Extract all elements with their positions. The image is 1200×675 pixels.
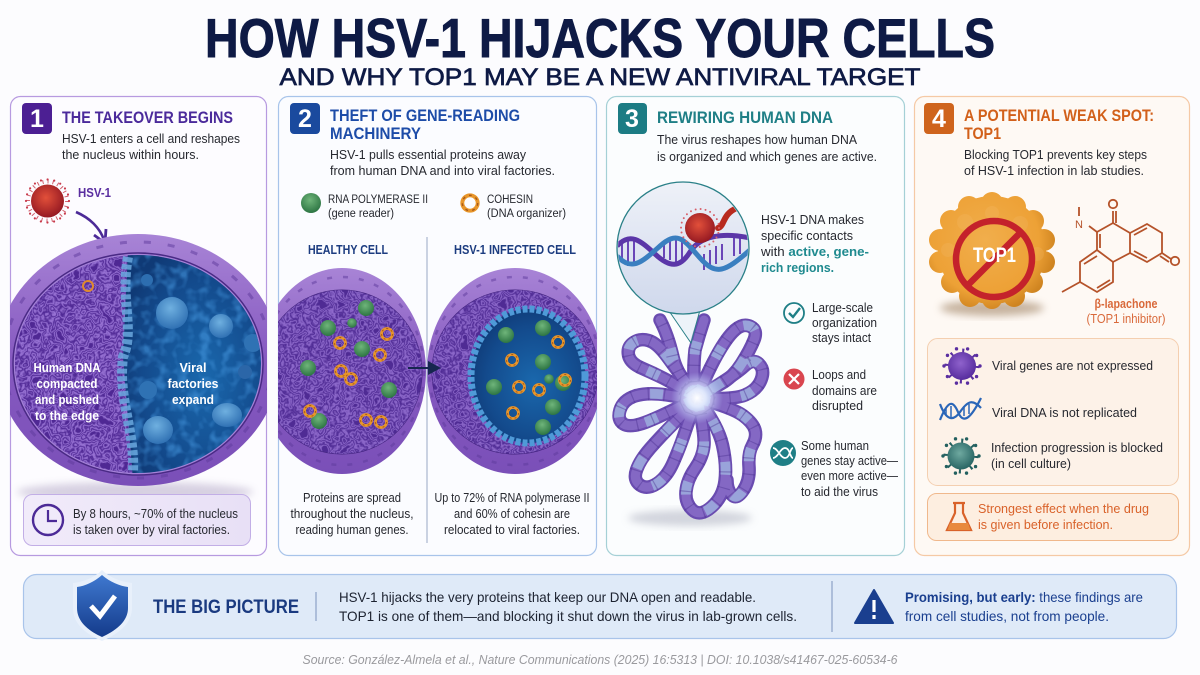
diagram: beta-lapachone molecule xyxy=(1062,200,1179,292)
label: human DNA compacted: and pushed xyxy=(35,392,99,407)
illustration: TOP1 protein blocked xyxy=(929,192,1055,316)
icon: check xyxy=(784,303,804,323)
heading: the big picture: THE BIG PICTURE xyxy=(153,597,299,618)
intro text: the nucleus within hours. xyxy=(62,147,199,162)
label: beta-lapachone xyxy=(1086,297,1166,326)
text: HSV-1 DNA contacts xyxy=(760,212,869,275)
text: HSV-1 DNA contacts: rich regions. xyxy=(761,260,834,275)
label: human DNA compacted: compacted xyxy=(36,376,98,391)
text: caution note: Promising, but early: these findings are xyxy=(905,589,1143,605)
callout text xyxy=(978,501,1149,532)
intro text xyxy=(330,147,555,178)
callout text: By 8 hours, ~70% of the nucleus xyxy=(73,507,238,521)
icon: clock xyxy=(33,505,63,535)
text: infected cell caption xyxy=(434,490,590,537)
badge 4: 4 xyxy=(932,105,946,133)
label: human DNA compacted: to the edge xyxy=(35,408,99,423)
label: human DNA compacted xyxy=(34,360,101,423)
arrow: healthy to infected xyxy=(408,361,441,375)
text: infected cell caption: Up to 72% of RNA polymerase II xyxy=(434,490,590,505)
legend: cohesin: (DNA organizer) xyxy=(487,208,566,220)
text: HSV-1 DNA contacts: HSV-1 DNA makes xyxy=(761,212,864,227)
illustration: magnified DNA lens xyxy=(617,182,750,314)
heading: theft of gene-reading machinery xyxy=(330,106,520,143)
intro text: from human DNA and into viral factories. xyxy=(330,163,555,178)
legend: RNA polymerase II: RNA POLYMERASE II xyxy=(328,194,428,206)
text: caution note: from cell studies, not from people. xyxy=(905,608,1109,624)
intro text xyxy=(964,147,1147,178)
text: genes stay active: genes stay active— xyxy=(801,454,898,468)
badge 4 xyxy=(924,103,954,134)
text: healthy cell caption: throughout the nucleus, xyxy=(290,506,414,521)
callout: strongest effect xyxy=(928,494,1178,540)
icon: shield xyxy=(73,570,132,641)
icon: flask xyxy=(947,503,971,530)
label: viral factories expand: Viral xyxy=(180,360,206,375)
text: healthy cell caption: reading human genes. xyxy=(296,522,408,537)
text: infection blocked: Infection progression is blocked xyxy=(991,441,1163,455)
label: HSV-1 infected cell: HSV-1 INFECTED CELL xyxy=(454,243,576,257)
icon: purple virus xyxy=(944,348,980,384)
text: big picture summary: TOP1 is one of them—and blocking it shut down the virus in lab-grown cells. xyxy=(339,608,797,624)
text: big picture summary xyxy=(339,589,797,624)
text: HSV-1 DNA contacts: specific contacts xyxy=(761,228,853,243)
text: organization intact: stays intact xyxy=(812,331,871,345)
badge 1 xyxy=(22,103,52,134)
divider between healthy and infected xyxy=(426,237,428,543)
badge 3 xyxy=(618,103,647,134)
icon: green virus xyxy=(943,438,979,474)
intro text xyxy=(62,131,240,162)
panel: 1 the takeover begins xyxy=(0,96,280,556)
divider xyxy=(315,592,317,621)
heading: theft of gene-reading machinery: THEFT OF GENE-READING xyxy=(330,106,520,125)
callout text: Strongest effect when the drug xyxy=(978,501,1149,516)
heading: a potential weak spot: TOP1 xyxy=(964,124,1001,143)
intro text: of HSV-1 infection in lab studies. xyxy=(964,163,1144,178)
heading: theft of gene-reading machinery: MACHINERY xyxy=(330,124,422,143)
callout text: is taken over by viral factories. xyxy=(73,523,230,537)
label: beta-lapachone: β-lapachone xyxy=(1094,297,1158,311)
legend: RNA polymerase II: (gene reader) xyxy=(328,208,394,220)
badge 2: 2 xyxy=(298,105,312,133)
intro text: HSV-1 enters a cell and reshapes xyxy=(62,131,240,146)
text: infected cell caption: and 60% of cohesin are xyxy=(454,506,570,521)
text: infected cell caption: relocated to viral factories. xyxy=(444,522,580,537)
illustration: infected cell xyxy=(427,268,603,474)
label: viral factories expand: expand xyxy=(172,392,214,407)
intro text: HSV-1 pulls essential proteins away xyxy=(330,147,526,162)
badge 1: 1 xyxy=(30,105,44,133)
box: effects of blocking TOP1 xyxy=(928,338,1178,486)
icon: cross xyxy=(784,368,804,390)
illustration: looped chromatin flower xyxy=(619,320,763,526)
banner: the big picture xyxy=(24,570,1176,641)
source citation: Source: González-Almela et al., Nature Communications (2025) 16:5313 | DOI: 10.1038/s41467-025-60534-6 xyxy=(302,653,898,667)
icon: HSV-1 virus xyxy=(26,180,69,222)
panel: 2 theft of gene-reading machinery xyxy=(258,96,603,556)
text: caution note xyxy=(905,589,1143,624)
text: genes stay active xyxy=(801,439,898,499)
intro text xyxy=(657,132,877,164)
badge 2 xyxy=(290,103,320,134)
text: organization intact: Large-scale xyxy=(812,301,873,315)
text: viral DNA: Viral DNA is not replicated xyxy=(992,406,1137,420)
icon: active genes xyxy=(770,440,796,466)
heading: a potential weak spot: A POTENTIAL WEAK SPOT: xyxy=(964,106,1154,125)
label: TOP1: TOP1 xyxy=(973,244,1016,267)
text: big picture summary: HSV-1 hijacks the very proteins that keep our DNA open and readable. xyxy=(339,589,756,605)
legend: RNA polymerase II xyxy=(301,193,428,220)
text: viral genes: Viral genes are not expressed xyxy=(992,359,1153,373)
label: viral factories expand: factories xyxy=(168,376,218,391)
title: HOW HSV-1 HIJACKS YOUR CELLS xyxy=(205,7,995,69)
callout: 8 hours xyxy=(24,494,250,546)
callout text xyxy=(73,507,238,537)
text: genes stay active: to aid the virus xyxy=(801,485,878,499)
intro text: Blocking TOP1 prevents key steps xyxy=(964,147,1147,162)
label: human DNA compacted: Human DNA xyxy=(34,360,101,375)
callout pointer xyxy=(667,308,700,343)
panel: 3 rewiring human DNA xyxy=(606,96,904,556)
heading: the takeover begins: THE TAKEOVER BEGINS xyxy=(62,108,233,127)
subtitle: AND WHY TOP1 MAY BE A NEW ANTIVIRAL TARGET xyxy=(280,64,921,91)
illustration: cell nucleus takeover xyxy=(0,234,280,502)
arrow: virus to cell xyxy=(76,212,106,243)
heading: a potential weak spot xyxy=(964,106,1154,143)
icon: DNA helix xyxy=(940,398,981,420)
text: loops disrupted: disrupted xyxy=(812,399,863,413)
heading: rewiring human DNA: REWIRING HUMAN DNA xyxy=(657,108,833,127)
text: HSV-1 DNA contacts: with active, gene- xyxy=(760,244,869,259)
label: healthy cell: HEALTHY CELL xyxy=(308,243,388,257)
text: genes stay active: Some human xyxy=(801,439,869,453)
text: healthy cell caption xyxy=(290,490,414,537)
illustration: healthy cell xyxy=(278,268,426,474)
label: HSV-1: HSV-1 xyxy=(78,186,111,200)
text: genes stay active: even more active— xyxy=(801,469,898,483)
callout text: is given before infection. xyxy=(978,517,1113,532)
label: beta-lapachone: (TOP1 inhibitor) xyxy=(1086,312,1166,326)
badge 3: 3 xyxy=(625,105,639,133)
label: viral factories expand xyxy=(168,360,218,407)
legend: cohesin: COHESIN xyxy=(487,194,533,206)
icon: warning triangle xyxy=(855,590,893,623)
divider xyxy=(831,581,833,632)
text: loops disrupted xyxy=(812,368,877,413)
text: organization intact: organization xyxy=(812,316,877,330)
text: infection blocked: (in cell culture) xyxy=(991,457,1071,471)
text: healthy cell caption: Proteins are spread xyxy=(303,490,401,505)
text: loops disrupted: domains are xyxy=(812,384,877,398)
panel: 4 a potential weak spot xyxy=(914,96,1190,556)
text: loops disrupted: Loops and xyxy=(812,368,866,382)
intro text: is organized and which genes are active. xyxy=(657,149,877,164)
intro text: The virus reshapes how human DNA xyxy=(657,132,857,147)
text: infection blocked xyxy=(991,441,1163,471)
diagram: beta-lapachone molecule: N xyxy=(1075,219,1083,231)
legend: cohesin xyxy=(462,194,566,220)
text: organization intact xyxy=(812,301,877,345)
